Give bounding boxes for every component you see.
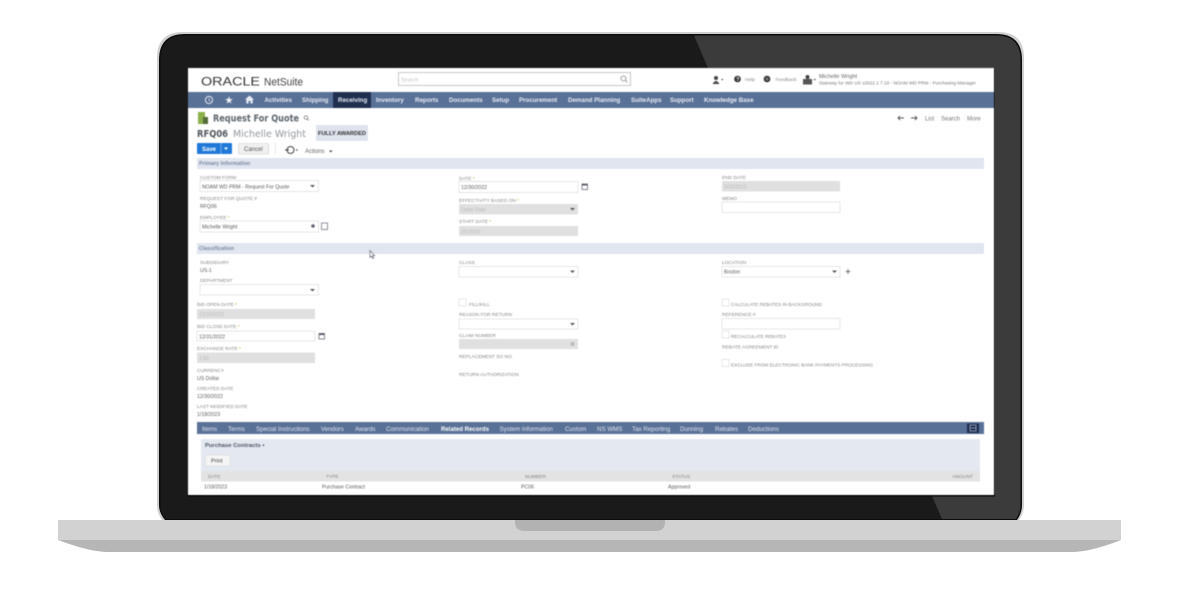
- classification fields: column 2: CLAIM NUMBER: [459, 333, 496, 339]
- section: Classification: [197, 243, 984, 254]
- classification fields: column 3: LOCATION: [722, 260, 747, 266]
- action buttons: Cancel: [244, 147, 263, 153]
- action buttons: [197, 143, 332, 155]
- classification fields: column 1: EXCHANGE RATE *: [197, 346, 241, 352]
- classification fields: column 1: BID OPEN DATE *: [197, 302, 237, 308]
- header: logo: [201, 74, 303, 88]
- primary fields: column 2: 2/1/2023: [461, 230, 481, 236]
- primary fields: column 1: RFQ06: [200, 204, 217, 210]
- status badge: [316, 125, 368, 141]
- header: user tools: Feedback: [776, 77, 797, 83]
- navigation bar: Knowledge Base: [704, 97, 754, 104]
- navigation bar: Activities: [264, 97, 293, 104]
- action buttons: Actions: [305, 149, 325, 155]
- tab bar: Communication: [386, 426, 430, 433]
- primary fields: column 1: CUSTOM FORM: [200, 175, 236, 181]
- classification fields: column 1: BID CLOSE DATE *: [197, 324, 240, 330]
- tab bar: Tax Reporting: [632, 426, 671, 433]
- record identity: [197, 129, 306, 140]
- classification fields: column 3: [722, 260, 873, 368]
- section: Primary Information: [197, 158, 984, 169]
- page title: Request For Quote: Request For Quote: [213, 114, 299, 124]
- navigation bar: [188, 92, 994, 108]
- panel: purchase contracts: PC06: [521, 484, 534, 490]
- classification fields: column 3: REFERENCE #: [722, 312, 756, 318]
- classification fields: column 3: Boston: [724, 270, 740, 276]
- primary fields: column 3: END DATE: [722, 175, 746, 181]
- panel: purchase contracts: STATUS: [672, 474, 690, 480]
- navigation bar: Support: [670, 97, 694, 104]
- panel: purchase contracts: NUMBER: [525, 474, 546, 480]
- primary fields: column 1: EMPLOYEE *: [200, 215, 230, 221]
- classification fields: column 2: FILL/KILL: [469, 302, 490, 308]
- panel: purchase contracts: Purchase Contract: [322, 484, 366, 490]
- tab bar: Items: [202, 426, 217, 433]
- navigation bar: ★: [224, 96, 234, 106]
- tab bar: Awards: [355, 426, 376, 433]
- tab bar: [197, 422, 984, 434]
- header: search box: Search: [401, 78, 418, 84]
- status badge: FULLY AWARDED: [318, 131, 366, 137]
- classification fields: column 1: 12/30/2022: [199, 312, 224, 318]
- section: Primary Information: Primary Information: [199, 161, 250, 167]
- tab bar: Related Records: [441, 426, 490, 433]
- action buttons: Save: [202, 147, 217, 153]
- panel: purchase contracts: 1/18/2023: [204, 484, 227, 490]
- classification fields: column 3: RECALCULATE REBATES: [731, 334, 786, 340]
- navigation bar: Demand Planning: [568, 97, 620, 104]
- classification fields: column 2: REASON FOR RETURN: [459, 312, 513, 318]
- navigation bar: SuiteApps: [631, 97, 662, 104]
- tab bar: Terms: [228, 426, 245, 433]
- primary fields: column 3: 3/30/2023: [724, 184, 746, 190]
- primary fields: column 2: 12/30/2022: [461, 185, 487, 191]
- header: user tools: [712, 74, 977, 86]
- panel: purchase contracts: Print: [211, 458, 223, 464]
- header: user tools: ?: [736, 77, 739, 83]
- laptop base: [58, 520, 1121, 552]
- tab bar: System Information: [500, 426, 553, 433]
- record identity: Michelle Wright: [233, 129, 306, 140]
- classification fields: column 1: DEPARTMENT: [200, 278, 233, 284]
- primary fields: column 2: START DATE *: [459, 219, 491, 225]
- tab bar: Custom: [565, 426, 586, 433]
- classification fields: column 1: US-1: [200, 268, 212, 274]
- navigation bar: Reports: [415, 97, 439, 104]
- classification fields: column 3: REBATE AGREEMENT ID: [722, 344, 779, 350]
- tab bar: NS WMS: [597, 426, 622, 433]
- tab bar: Deductions: [748, 426, 779, 433]
- primary fields: column 2: [459, 176, 588, 236]
- primary fields: column 1: NOAM WD PRM - Request For Quote: [202, 184, 289, 190]
- classification fields: column 1: SUBSIDIARY: [200, 260, 230, 266]
- tab bar: Special Instructions: [256, 426, 310, 433]
- navigation bar: Shipping: [302, 97, 329, 104]
- classification fields: column 1: 1/18/2023: [197, 412, 220, 418]
- primary fields: column 2: DATE *: [459, 176, 475, 182]
- section: Classification: Classification: [199, 246, 234, 252]
- classification fields: column 1: 12/30/2022: [197, 394, 223, 400]
- panel: purchase contracts: [201, 439, 980, 495]
- primary fields: column 2: EFFECTIVITY BASED ON *: [459, 198, 519, 204]
- panel: purchase contracts: DATE: [208, 474, 220, 480]
- record navigation links: [898, 116, 981, 122]
- laptop lid: [157, 32, 1024, 520]
- primary fields: column 3: MEMO: [722, 196, 737, 202]
- classification fields: column 1: CURRENCY: [197, 368, 225, 374]
- navigation bar: Inventory: [376, 97, 404, 104]
- record navigation links: List: [925, 116, 935, 122]
- primary fields: column 1: REQUEST FOR QUOTE #: [200, 196, 257, 202]
- panel: purchase contracts: Approved: [668, 484, 690, 490]
- classification fields: column 2: [459, 260, 578, 378]
- application screen: [188, 68, 994, 495]
- panel: purchase contracts: TYPE: [326, 474, 339, 480]
- record navigation links: More: [967, 116, 981, 122]
- classification fields: column 3: CALCULATE REBATES IN BACKGROUND: [731, 302, 823, 308]
- panel: purchase contracts: AMOUNT: [952, 474, 973, 480]
- header: user tools: Help: [745, 77, 755, 83]
- classification fields: column 2: RETURN AUTHORIZATION: [459, 372, 519, 378]
- navigation bar: Procurement: [519, 97, 557, 104]
- record navigation links: Search: [941, 116, 960, 122]
- tab bar: Rebates: [715, 426, 738, 433]
- navigation bar: Documents: [449, 97, 483, 104]
- classification fields: column 1: US Dollar: [197, 376, 219, 382]
- navigation bar: Receiving: [338, 97, 367, 104]
- record identity: RFQ06: [197, 129, 228, 140]
- tab bar: Dunning: [680, 426, 704, 433]
- header: search box: [398, 72, 630, 86]
- navigation bar: Setup: [492, 97, 509, 104]
- header: logo: ORACLE: [201, 74, 260, 88]
- classification fields: column 1: CREATED DATE: [197, 386, 233, 392]
- classification fields: column 1: 12/31/2022: [199, 334, 225, 340]
- classification fields: column 2: REPLACEMENT SO NO.: [459, 354, 513, 360]
- tab bar: Vendors: [321, 426, 344, 433]
- panel: purchase contracts: Purchase Contracts ▪: [205, 443, 264, 449]
- header: user tools: Michelle Wright: [819, 74, 858, 80]
- classification fields: column 1: [197, 260, 324, 418]
- primary fields: column 1: [200, 175, 328, 232]
- primary fields: column 3: [722, 175, 840, 212]
- classification fields: column 3: EXCLUDE FROM ELECTRONIC BANK PAYMENTS PROCESSING: [731, 362, 873, 368]
- classification fields: column 1: 1.00: [199, 356, 209, 362]
- icon: mouse cursor: [370, 250, 375, 259]
- primary fields: column 2: Order Date: [461, 208, 486, 214]
- header: logo: NetSuite: [264, 76, 303, 88]
- classification fields: column 1: LAST MODIFIED DATE: [197, 404, 247, 410]
- header: user tools: Stairway for WD US v2022.1 7.19 - NOAM WD PRM - Purchasing Manager: [819, 80, 977, 86]
- primary fields: column 1: Michelle Wright: [202, 224, 238, 230]
- classification fields: column 2: CLASS: [459, 260, 475, 266]
